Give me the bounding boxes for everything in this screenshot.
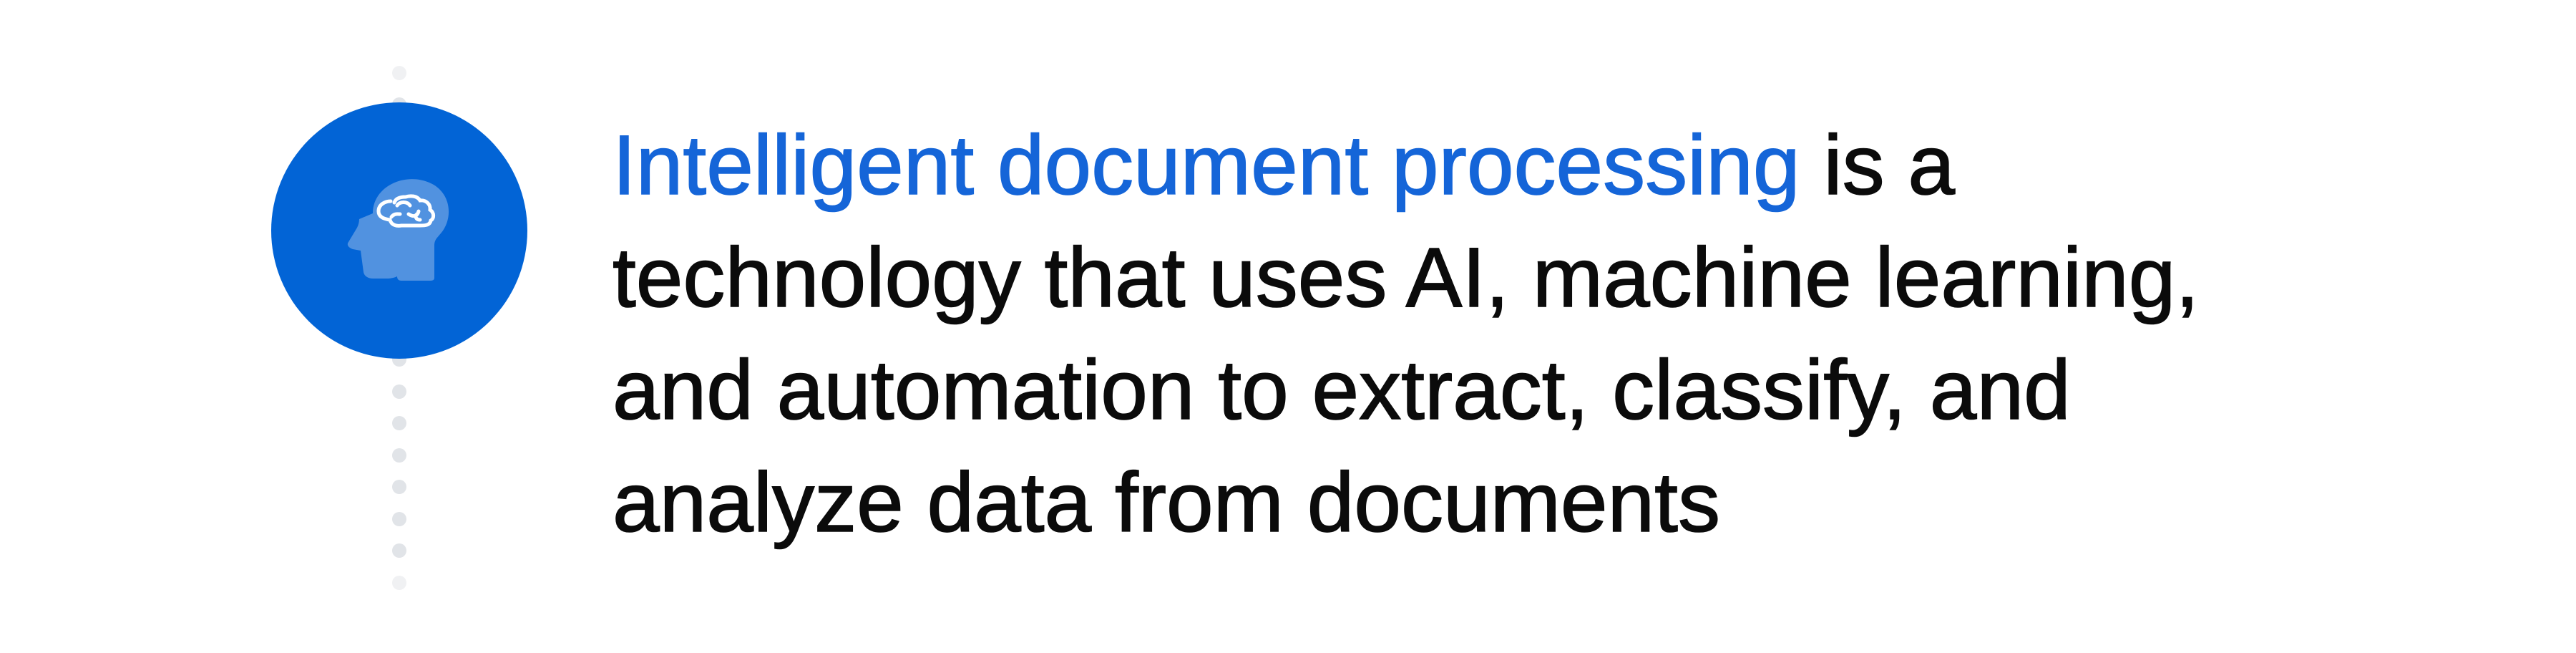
icon circle: brain head (271, 102, 527, 359)
definition text block: technology that uses AI, machine learning, (613, 231, 2199, 325)
icon: head with brain (348, 179, 449, 281)
definition text block: analyze data from documents (613, 455, 1720, 550)
definition text block: and automation to extract, classify, and (613, 343, 2071, 437)
definition text block: Intelligent document processing is a (613, 118, 1955, 213)
dotted timeline (392, 66, 406, 590)
definition text block (613, 118, 2199, 550)
